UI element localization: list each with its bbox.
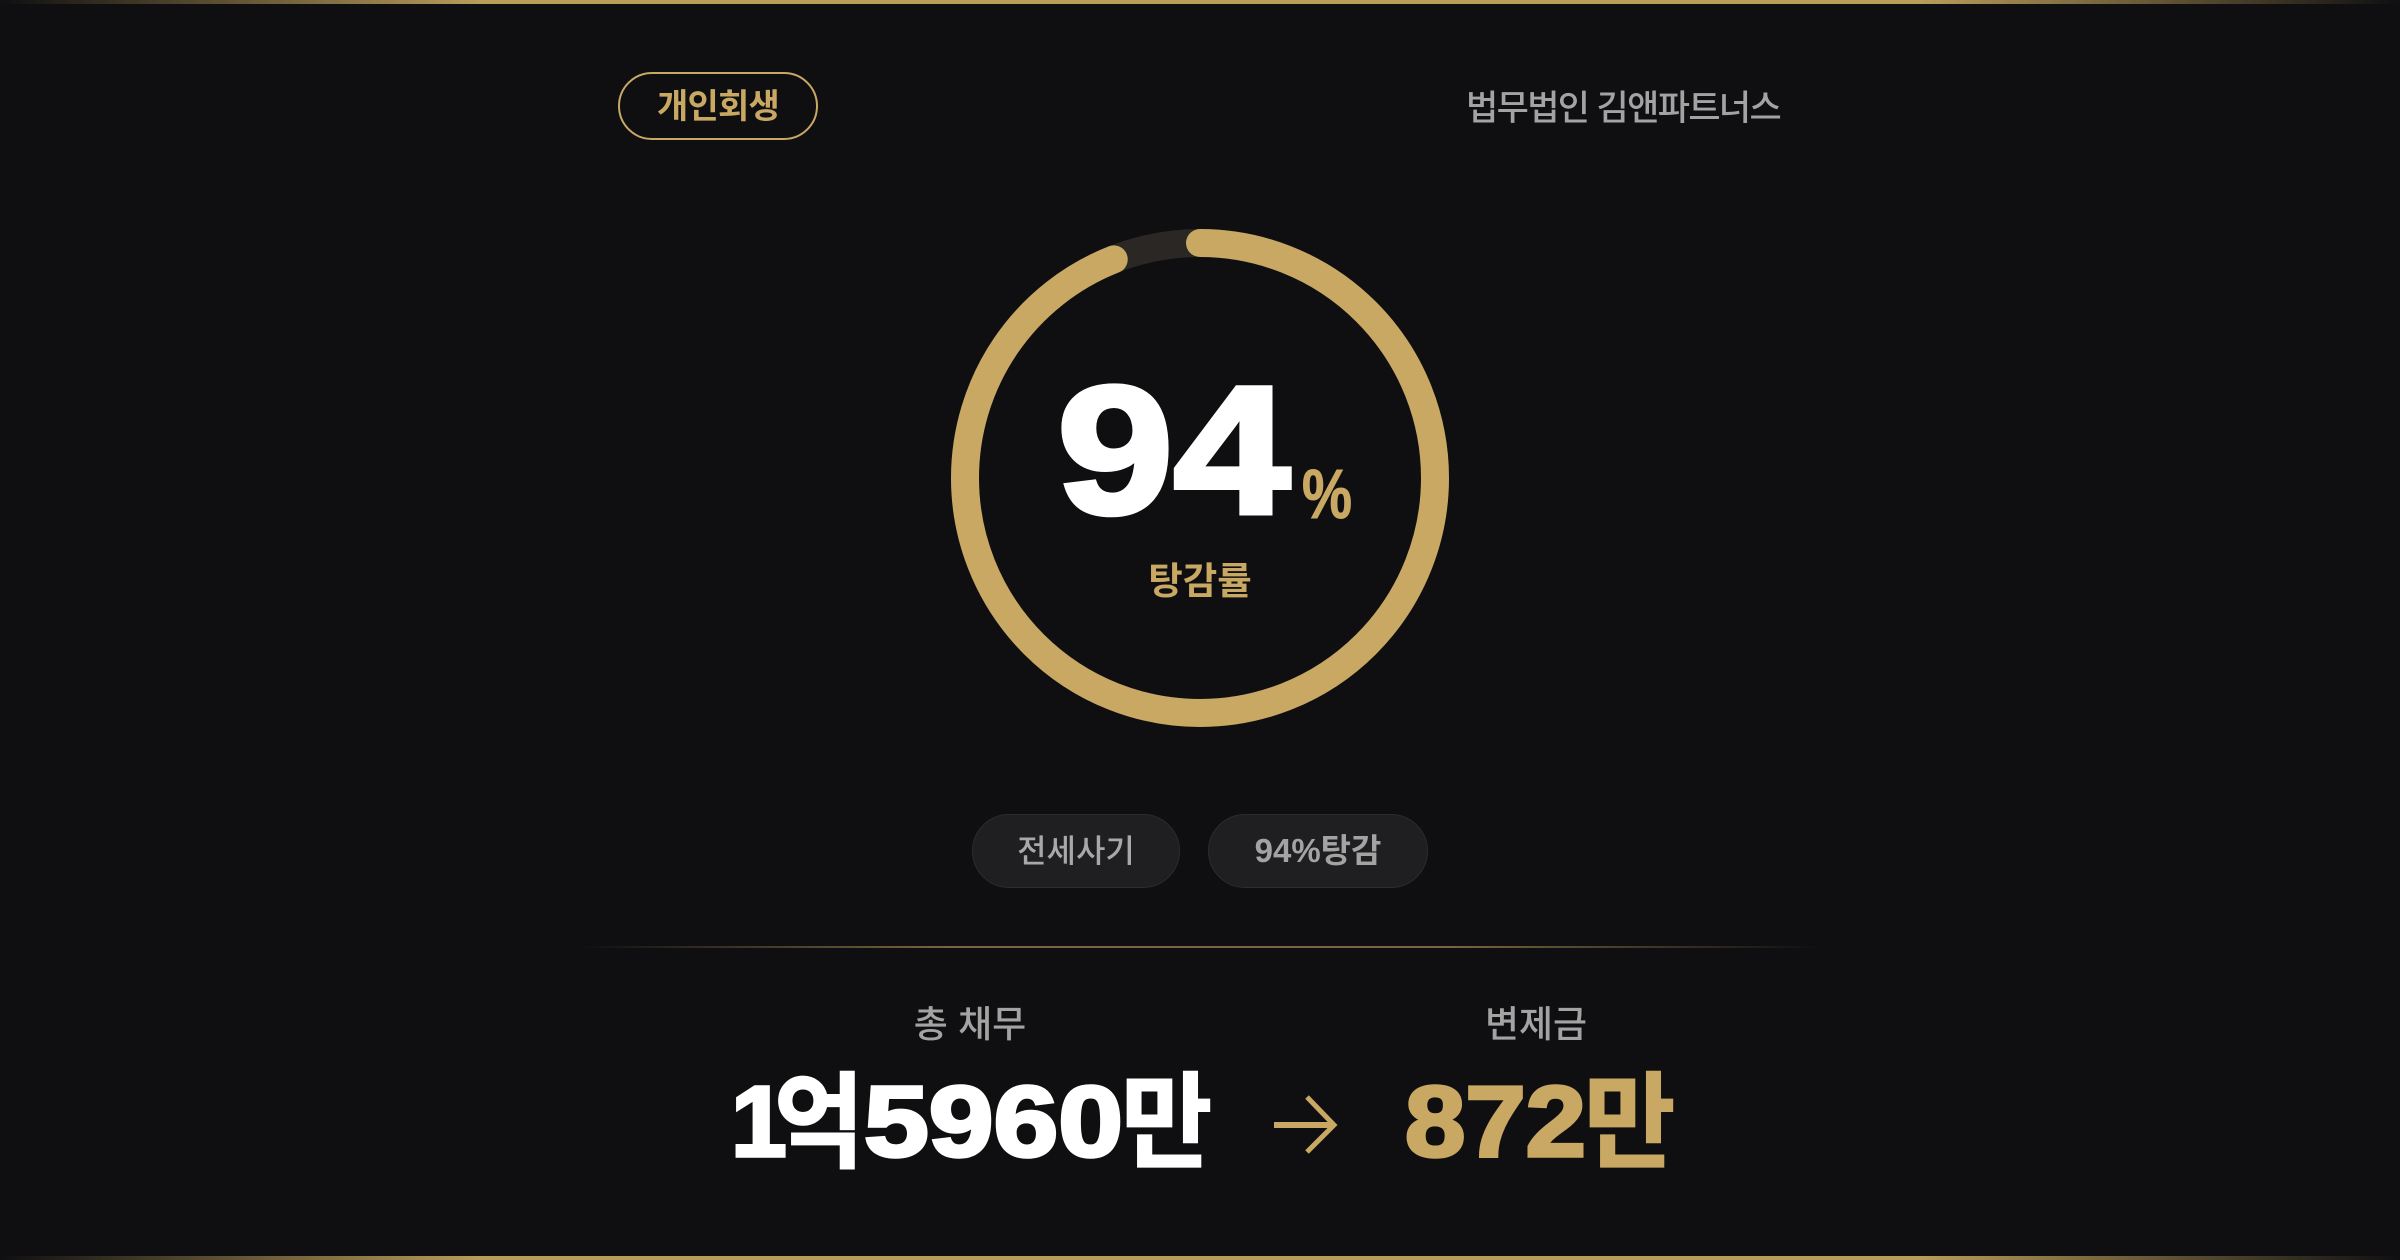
- tag: 94% reduction: 94%탕감: [1255, 832, 1381, 869]
- bottom gold bar: [0, 1256, 2400, 1260]
- value: total debt: 만: [1121, 1066, 1212, 1180]
- tag: jeonse fraud: 전세사기: [1017, 833, 1135, 869]
- value: total debt: [731, 1066, 1212, 1180]
- value: repayment: 872: [1405, 1066, 1586, 1178]
- arrow: [1274, 1095, 1338, 1154]
- value: total debt: 억: [774, 1066, 864, 1180]
- value: total debt: 1: [731, 1066, 787, 1178]
- tag: 94% reduction: [1208, 814, 1428, 888]
- value: total debt: 5960: [864, 1066, 1123, 1178]
- category badge: 개인회생: [657, 88, 779, 126]
- label: total debt: 총 채무: [914, 1004, 1026, 1045]
- label: repayment: 변제금: [1485, 1004, 1587, 1045]
- top gold bar: [0, 0, 2400, 4]
- value: repayment: 만: [1584, 1066, 1675, 1180]
- reduction rate label: 탕감률: [1148, 560, 1252, 602]
- donut gauge: 94%: [951, 229, 1449, 727]
- category badge: [618, 72, 818, 140]
- value: repayment: [1405, 1066, 1675, 1180]
- tag: jeonse fraud: [972, 814, 1180, 888]
- law firm name: 법무법인 김앤파트너스: [1466, 89, 1780, 128]
